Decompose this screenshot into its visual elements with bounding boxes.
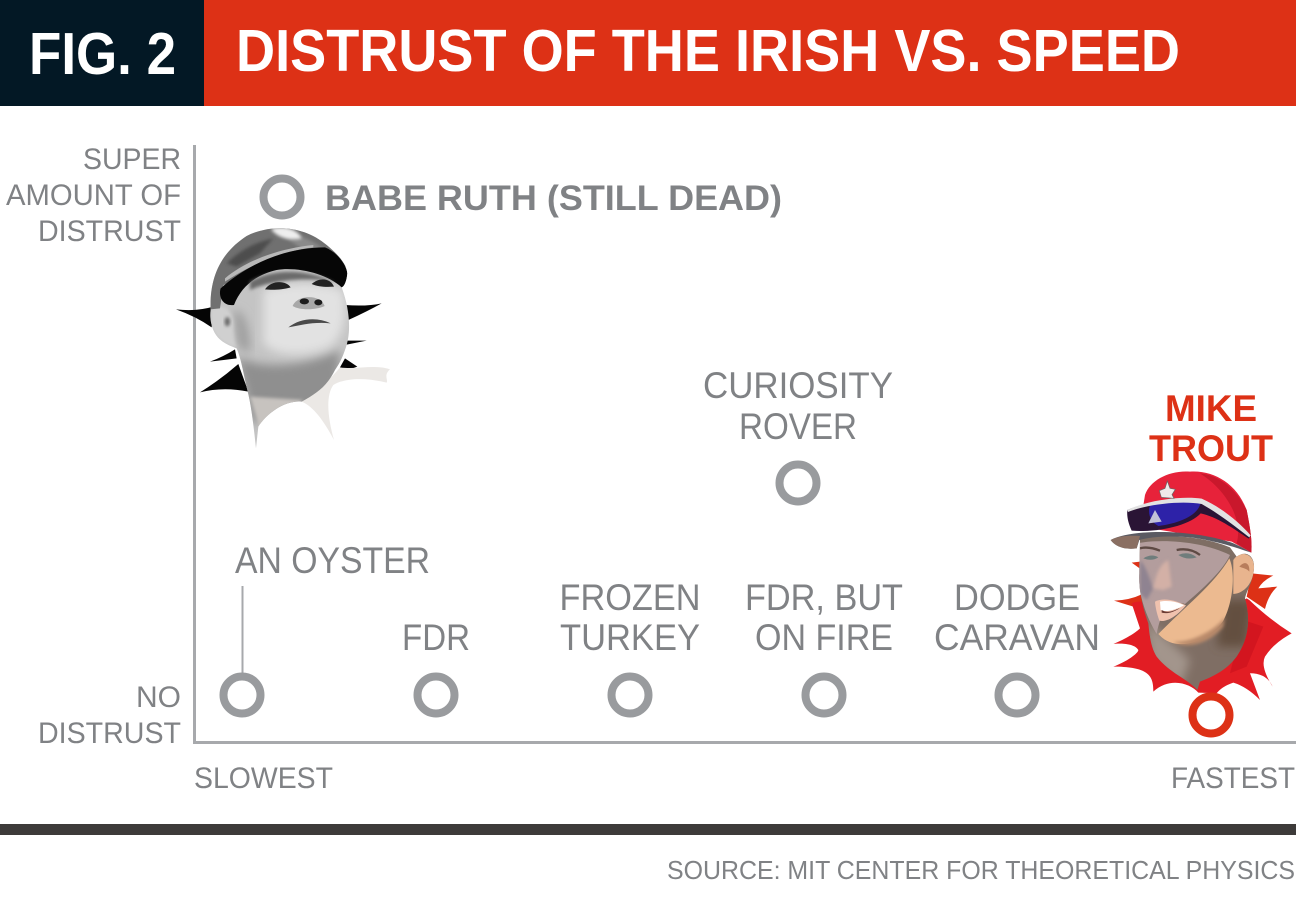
point: An Oyster: AN OYSTER (235, 540, 430, 581)
y axis bottom label (38, 681, 181, 750)
point: Dodge Caravan: CARAVAN (934, 617, 1100, 658)
label: Mike Trout (1149, 388, 1273, 469)
point: FDR, but on fire: FDR, BUT (745, 577, 903, 618)
point: FDR (402, 617, 470, 714)
y axis bottom label: DISTRUST (38, 717, 181, 750)
photo: Mike Trout (1111, 471, 1292, 700)
point: Mike Trout (1192, 696, 1230, 734)
label: Mike Trout: TROUT (1149, 428, 1273, 469)
point: FDR: FDR (402, 617, 470, 658)
chart axes (194, 145, 1296, 742)
title: DISTRUST OF THE IRISH VS. SPEED (236, 18, 1180, 84)
y axis top label: AMOUNT OF (6, 179, 181, 212)
header bar (0, 0, 1296, 106)
point: FDR, but on fire (745, 577, 903, 714)
point: Dodge Caravan: DODGE (954, 577, 1080, 618)
point: FDR, but on fire: ON FIRE (755, 617, 893, 658)
y axis top label: SUPER (83, 143, 181, 176)
point: Frozen Turkey: TURKEY (560, 617, 700, 658)
point: Curiosity Rover (703, 365, 893, 502)
y axis top label: DISTRUST (38, 215, 181, 248)
point: Frozen Turkey (560, 577, 700, 714)
point: Dodge Caravan (934, 577, 1100, 714)
point: Curiosity Rover: ROVER (739, 406, 857, 447)
label: Mike Trout: MIKE (1165, 388, 1257, 429)
photo: Babe Ruth (176, 220, 390, 453)
point: Frozen Turkey: FROZEN (560, 577, 700, 618)
point: An Oyster (224, 540, 430, 714)
bottom rule (0, 824, 1296, 835)
point: Curiosity Rover: CURIOSITY (703, 365, 893, 406)
y axis bottom label: NO (136, 681, 181, 714)
figure number: FIG. 2 (29, 21, 176, 87)
x axis slowest label: SLOWEST (194, 762, 333, 795)
y axis top label (6, 143, 181, 248)
point: Babe Ruth: BABE RUTH (STILL DEAD) (325, 179, 782, 218)
